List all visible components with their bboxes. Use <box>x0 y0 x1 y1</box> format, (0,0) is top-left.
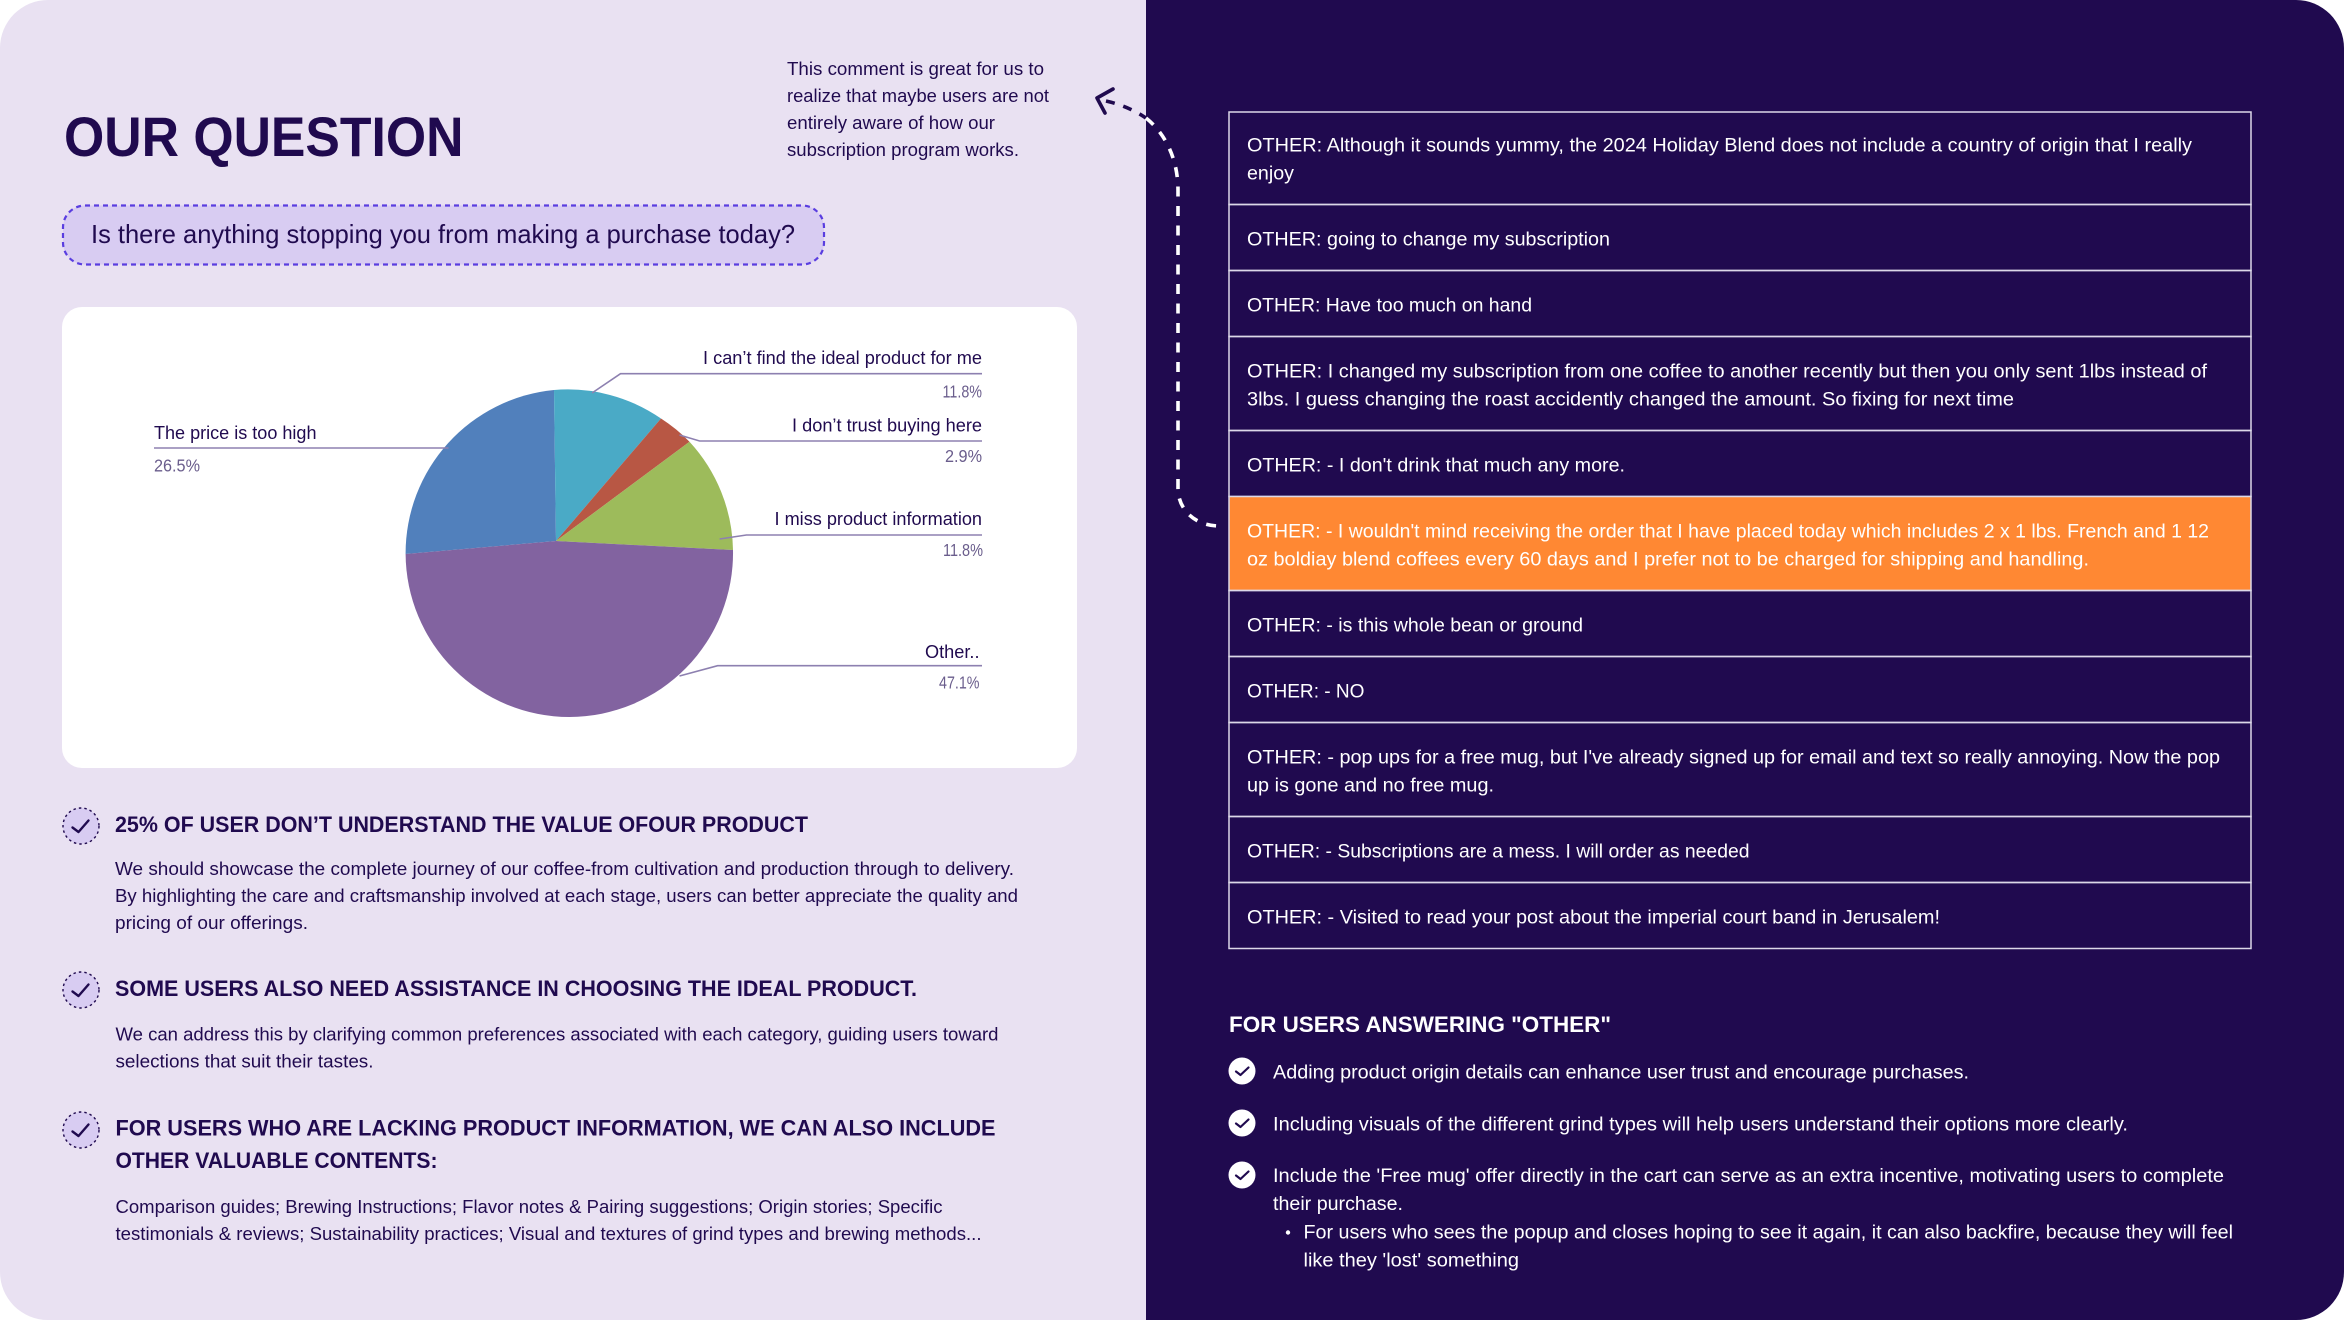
label: other: Other.. <box>925 642 980 662</box>
row 3 <box>1229 270 2251 336</box>
row 4: OTHER: I changed my subscription from one coffee to another recently but then you only sent 1lbs instead of <box>1247 360 2208 382</box>
heading: SOME USERS ALSO NEED ASSISTANCE IN CHOOSING THE IDEAL PRODUCT. <box>115 976 917 1001</box>
text block: Include the 'Free mug' offer directly in the cart can serve as an extra incentive, motivating users to complete <box>1273 1166 2224 1187</box>
row 4: 3lbs. I guess changing the roast accidently changed the amount. So fixing for next time <box>1247 388 2014 410</box>
row 9: up is gone and no free mug. <box>1247 774 1494 796</box>
row 7: OTHER: - is this whole bean or ground <box>1247 614 1583 636</box>
row 10 <box>1229 816 2251 882</box>
recommendation 2 <box>1228 1110 2128 1136</box>
label: don't trust buying: 2.9% <box>945 446 982 466</box>
callout: comment annotation: entirely aware of how our <box>787 113 995 133</box>
sub-bullet: For users who sees the popup and closes hoping to see it again, it can also backfire, because they will feel <box>1304 1222 2233 1244</box>
finding 1 <box>63 808 1018 933</box>
text block: We can address this by clarifying common preferences associated with each category, guiding users toward <box>116 1024 998 1044</box>
label: can't find ideal product: 11.8% <box>942 382 982 402</box>
callout: comment annotation: This comment is great for us to <box>787 59 1044 79</box>
text block: their purchase. <box>1273 1194 1403 1215</box>
row 11 <box>1229 882 2251 948</box>
text block: selections that suit their tastes. <box>116 1050 374 1072</box>
heading: OTHER VALUABLE CONTENTS: <box>116 1148 438 1173</box>
sub-bullet <box>1286 1222 2233 1272</box>
row 5: OTHER: - I don't drink that much any more. <box>1247 454 1625 476</box>
finding 3 <box>63 1112 996 1244</box>
arrow: dashed connector from highlighted comment to annotation <box>1097 89 1220 526</box>
row 9 <box>1229 722 2251 816</box>
label: miss product information: I miss product information <box>774 509 982 529</box>
row 1: enjoy <box>1247 162 1294 184</box>
label: don't trust buying <box>680 416 982 466</box>
recommendation 3 <box>1228 1162 2233 1272</box>
row 4 <box>1229 336 2251 430</box>
callout: comment annotation: subscription program works. <box>787 140 1019 160</box>
row 8 <box>1229 656 2251 722</box>
text block: Adding product origin details can enhance user trust and encourage purchases. <box>1273 1062 1969 1084</box>
text block <box>115 858 1018 933</box>
label: other <box>680 642 982 692</box>
row 7 <box>1229 590 2251 656</box>
icon: white check <box>1228 1058 1256 1084</box>
row 9: OTHER: - pop ups for a free mug, but I've already signed up for email and text so really annoying. Now the pop <box>1247 746 2220 768</box>
icon: check badge <box>63 972 99 1008</box>
title: OUR QUESTION <box>64 105 464 168</box>
label: miss product information <box>720 509 983 560</box>
callout: comment annotation <box>787 59 1049 160</box>
pie chart <box>406 389 733 717</box>
text block: By highlighting the care and craftsmanship involved at each stage, users can better appreciate the quality and <box>115 885 1018 906</box>
row 10: OTHER: - Subscriptions are a mess. I will order as needed <box>1247 840 1750 862</box>
heading: FOR USERS WHO ARE LACKING PRODUCT INFORMATION, WE CAN ALSO INCLUDE <box>116 1116 996 1140</box>
row 8: OTHER: - NO <box>1247 680 1364 702</box>
text block <box>116 1196 981 1244</box>
row 11: OTHER: - Visited to read your post about the imperial court band in Jerusalem! <box>1247 906 1940 928</box>
row 3: OTHER: Have too much on hand <box>1247 294 1532 316</box>
label: price too high: The price is too high <box>154 423 316 443</box>
text block <box>1273 1166 2224 1215</box>
row 6: highlighted comment <box>1229 496 2251 590</box>
label: other: 47.1% <box>939 672 980 692</box>
panel: left question panel <box>0 0 1146 1320</box>
text block: pricing of our offerings. <box>115 912 308 933</box>
icon: check badge <box>63 1112 99 1148</box>
text block: We should showcase the complete journey of our coffee-from cultivation and production through to delivery. <box>115 858 1014 879</box>
label: price too high <box>154 423 448 476</box>
row 1 <box>1229 112 2251 204</box>
icon: white check <box>1228 1110 1256 1136</box>
row 2 <box>1229 204 2251 270</box>
label: don't trust buying: I don’t trust buying here <box>792 416 982 436</box>
callout: comment annotation: realize that maybe users are not <box>787 86 1049 106</box>
icon: check badge <box>63 808 99 844</box>
icon: white check <box>1228 1162 1256 1188</box>
heading: 25% OF USER DON’T UNDERSTAND THE VALUE OFOUR PRODUCT <box>115 812 809 837</box>
text block: Comparison guides; Brewing Instructions; Flavor notes & Pairing suggestions; Origin stories; Specific <box>116 1196 942 1217</box>
label: can't find ideal product: I can’t find the ideal product for me <box>703 348 982 368</box>
text block: Including visuals of the different grind types will help users understand their options more clearly. <box>1273 1114 2128 1136</box>
row 5 <box>1229 430 2251 496</box>
question pill <box>63 206 824 264</box>
recommendation 1 <box>1228 1058 1969 1084</box>
finding 2 <box>63 972 998 1072</box>
row 1: OTHER: Although it sounds yummy, the 2024 Holiday Blend does not include a country of origin that I really <box>1247 134 2192 156</box>
question pill: Is there anything stopping you from making a purchase today? <box>91 219 795 249</box>
label: can't find ideal product <box>592 348 982 402</box>
panel: responses table <box>1229 112 2251 948</box>
heading <box>116 1116 996 1173</box>
text block <box>116 1024 998 1072</box>
heading: for users answering other: FOR USERS ANSWERING "OTHER" <box>1229 1012 1611 1037</box>
row 2: OTHER: going to change my subscription <box>1247 228 1610 250</box>
sub-bullet: like they 'lost' something <box>1304 1250 1519 1272</box>
label: price too high: 26.5% <box>154 456 200 476</box>
text block: testimonials & reviews; Sustainability practices; Visual and textures of grind types and brewing methods... <box>116 1223 981 1244</box>
label: miss product information: 11.8% <box>943 540 983 560</box>
panel: pie chart card <box>62 307 1077 768</box>
row 6: highlighted comment: OTHER: - I wouldn't mind receiving the order that I have placed today which includes 2 x 1 lbs. French and 1 12 <box>1247 520 2209 542</box>
panel: right responses panel <box>1146 0 2344 1320</box>
row 6: highlighted comment: oz boldiay blend coffees every 60 days and I prefer not to be charged for shipping and handling. <box>1247 548 2089 570</box>
